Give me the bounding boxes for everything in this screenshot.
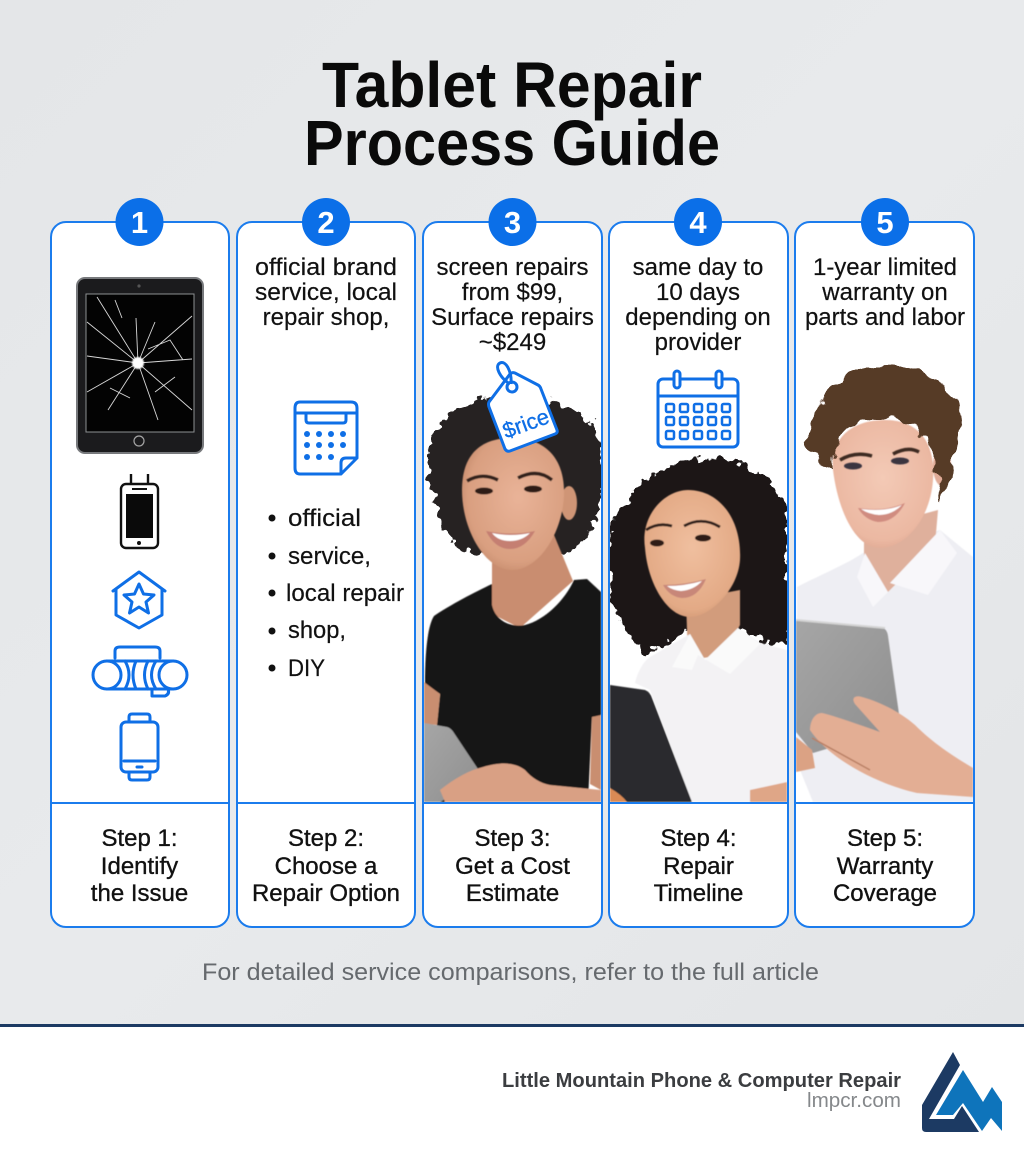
bullet list: official [288, 505, 361, 532]
badge 3: 3 [504, 205, 521, 240]
step 5 description [805, 254, 965, 331]
portrait: woman in white polo [609, 458, 787, 802]
step 2 label: Choose a [275, 853, 378, 880]
bullet list: shop, [288, 617, 346, 644]
step 4 description: 10 days [656, 279, 740, 306]
step 1 label: Step 1: [101, 825, 178, 852]
badge 3 [488, 198, 536, 246]
step 5 description: 1-year limited [813, 254, 957, 281]
step 3 description: from $99, [462, 279, 563, 306]
step 5 label: Step 5: [847, 825, 923, 852]
footer [0, 1024, 1024, 1154]
panel: step 1 [51, 198, 229, 927]
panel: step 2 [237, 198, 415, 927]
step 3 label: Estimate [466, 880, 559, 907]
step 2 label [252, 825, 400, 907]
icon: calendar [658, 371, 738, 447]
company name: Little Mountain Phone & Computer Repair [502, 1070, 901, 1092]
step 1 label: the Issue [91, 880, 188, 907]
badge 2: 2 [317, 205, 335, 240]
bullet list: local repair [286, 580, 404, 607]
step 4 description: same day to [633, 254, 763, 281]
step 3 label [455, 825, 570, 907]
step 4 label [654, 825, 743, 907]
step 1 label: Identify [101, 853, 178, 880]
step 3 description: screen repairs [436, 254, 589, 281]
step 2 label: Repair Option [252, 880, 400, 907]
logo [922, 1052, 1002, 1132]
badge 4: 4 [689, 205, 707, 240]
badge 4 [674, 198, 722, 246]
step 3 description: Surface repairs [431, 304, 594, 331]
panel: step 4 [609, 198, 788, 927]
icon: phone with prongs [121, 474, 158, 548]
caption: For detailed service comparisons, refer to the full article [202, 959, 819, 986]
icon: calendar sheet [295, 402, 357, 474]
step 2 description: repair shop, [263, 304, 389, 331]
step 3 description [431, 254, 594, 356]
step 4 description: provider [655, 329, 741, 356]
step 5 label: Coverage [833, 880, 937, 907]
step 5 label: Warranty [837, 853, 933, 880]
badge 5: 5 [876, 205, 894, 240]
badge 2 [302, 198, 350, 246]
step 2 description: official brand [255, 254, 397, 281]
step 2 label: Step 2: [288, 825, 364, 852]
step 4 description: depending on [625, 304, 771, 331]
portrait: young man with tablet [796, 366, 973, 802]
step 4 description [625, 254, 771, 356]
step 3 description: ~$249 [479, 329, 546, 356]
step 5 description: warranty on [821, 279, 948, 306]
step 3 label: Get a Cost [455, 853, 570, 880]
step 2 description: service, local [255, 279, 397, 306]
bullet list: service, [288, 543, 371, 570]
website: lmpcr.com [807, 1090, 901, 1112]
step 3 label: Step 3: [474, 825, 551, 852]
bullet list [268, 505, 404, 682]
step 5 description: parts and labor [805, 304, 965, 331]
title: Process Guide [304, 107, 720, 179]
badge 1 [116, 198, 164, 246]
icon: star in hexagon [113, 572, 165, 628]
step 4 label: Timeline [654, 880, 743, 907]
step 2 description [255, 254, 397, 331]
icon: cracked tablet [77, 278, 203, 453]
bullet list: DIY [288, 655, 325, 682]
badge 5 [861, 198, 909, 246]
panel: step 5 [795, 198, 974, 927]
panel: step 3 [423, 198, 603, 927]
step 4 label: Step 4: [660, 825, 737, 852]
icon: roller [93, 647, 187, 696]
portrait: woman in black shirt [424, 396, 603, 802]
icon: price tag: $rice [499, 404, 553, 443]
title: Tablet Repair [322, 49, 702, 121]
step 4 label: Repair [663, 853, 734, 880]
icon: small phone [121, 714, 158, 780]
step 1 label [91, 825, 188, 907]
step 5 label [833, 825, 937, 907]
title [304, 49, 720, 179]
badge 1: 1 [131, 205, 148, 240]
icon: price tag [488, 363, 557, 451]
